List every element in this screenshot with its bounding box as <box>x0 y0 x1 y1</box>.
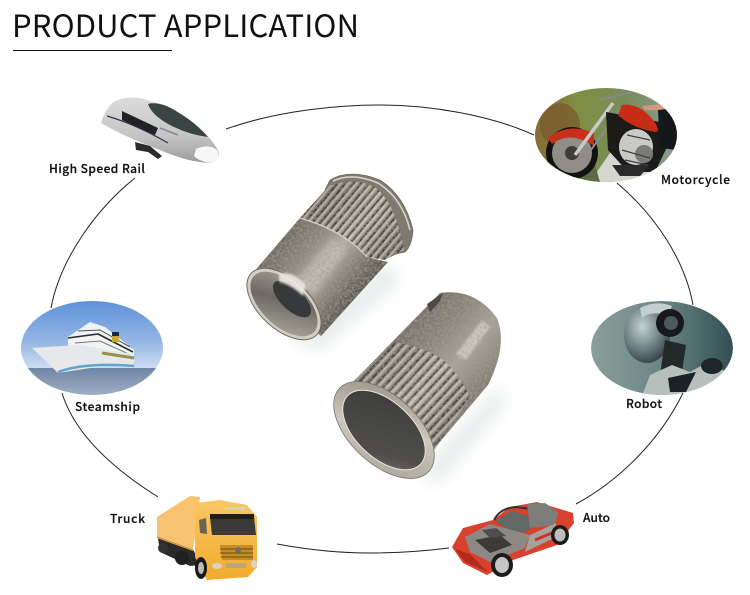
icon: steamship <box>21 301 163 395</box>
icon: motorcycle <box>535 88 677 182</box>
connector ring arcs <box>51 105 693 553</box>
icon: truck <box>157 496 257 580</box>
icon: high speed rail <box>101 98 219 163</box>
title: PRODUCT APPLICATION <box>12 1 359 46</box>
icon: cutaway car <box>452 502 574 577</box>
rivet nut: upper left <box>234 174 413 353</box>
label: steamship: Steamship <box>75 398 140 415</box>
icon: robot <box>591 301 733 396</box>
label: truck: Truck <box>110 510 145 527</box>
title underline <box>13 50 172 51</box>
label: high speed rail: High Speed Rail <box>49 160 145 177</box>
label: robot: Robot <box>626 395 662 412</box>
rivet nut: lower right <box>316 292 505 496</box>
label: auto: Auto <box>583 509 610 526</box>
label: motorcycle: Motorcycle <box>661 171 730 188</box>
